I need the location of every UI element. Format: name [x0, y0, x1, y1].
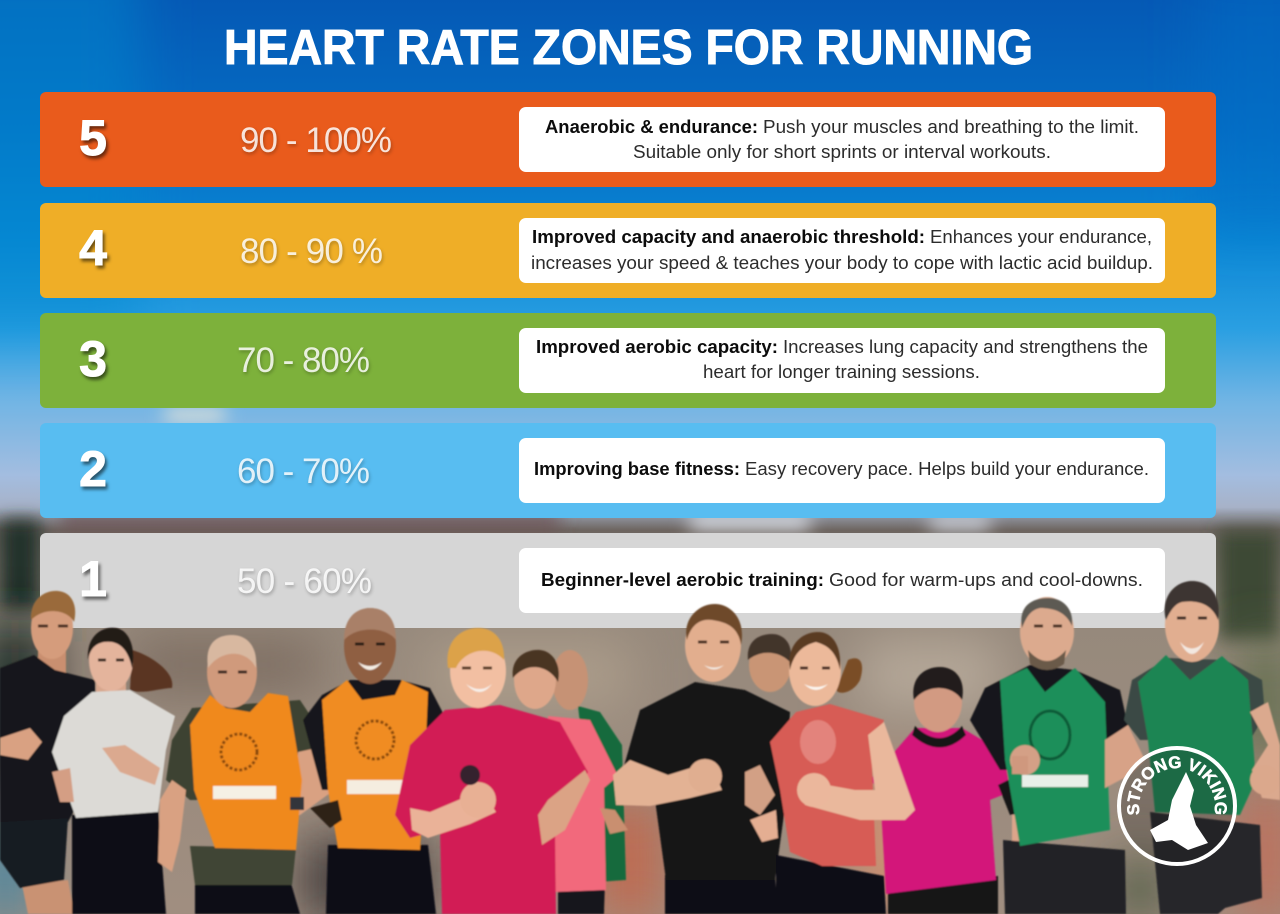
panel: zone 3	[40, 313, 1216, 408]
zone 2 number: 2	[79, 441, 107, 497]
logo: Strong Viking badge	[1117, 746, 1237, 866]
panel: zone 1	[40, 533, 1216, 628]
zone 5 description	[519, 107, 1165, 172]
zone 3 description: Improved aerobic capacity:	[536, 337, 778, 357]
panel: zone 5	[40, 92, 1216, 187]
zone 2 description	[519, 438, 1165, 503]
zone 4 number: 4	[79, 220, 107, 276]
zone 4 description: Enhances your endurance,	[930, 227, 1152, 247]
panel: zone 4	[40, 203, 1216, 298]
zone 2 description: Improving base fitness:	[534, 459, 740, 479]
runner: man in pink shirt with face paint	[513, 650, 628, 914]
zone 5 number: 5	[79, 110, 107, 166]
title: HEART RATE ZONES FOR RUNNING	[224, 21, 1033, 75]
icon: viking figure	[1150, 772, 1208, 850]
zone 3 description: heart for longer training sessions.	[703, 362, 980, 382]
zone 3 description: Increases lung capacity and strengthens the	[783, 337, 1148, 357]
zone 4 description: increases your speed & teaches your body to cope with lactic acid buildup.	[531, 253, 1153, 273]
zone 1 description: Beginner-level aerobic training:	[541, 570, 824, 590]
zone 3 percentage: 70 - 80%	[237, 341, 370, 380]
runner: woman in magenta shirt	[870, 667, 1040, 914]
zone 3 number: 3	[79, 331, 107, 387]
zone 1 percentage: 50 - 60%	[237, 562, 372, 601]
zone 4 percentage: 80 - 90 %	[240, 232, 383, 271]
zone 3 description	[519, 328, 1165, 393]
zone 2 percentage: 60 - 70%	[237, 452, 370, 491]
zone 1 description	[519, 548, 1165, 613]
zone 5 description: Suitable only for short sprints or interval workouts.	[633, 142, 1051, 162]
zone 2 description: Easy recovery pace. Helps build your endurance.	[745, 459, 1149, 479]
zone 1 description: Good for warm-ups and cool-downs.	[829, 570, 1143, 590]
zone 5 percentage: 90 - 100%	[240, 121, 392, 160]
runner: man in crimson long-sleeve shirt	[395, 628, 590, 914]
zone 1 number: 1	[79, 551, 107, 607]
zone 5 description: Anaerobic & endurance:	[545, 117, 758, 137]
runner: man in orange vest, smiling	[303, 608, 444, 914]
runner: man in black Nike t-shirt	[613, 604, 790, 914]
zone 4 description	[519, 218, 1165, 283]
panel: zone 2	[40, 423, 1216, 518]
runner: green shirt behind	[552, 650, 626, 882]
runner: man in green vest, far right	[1124, 581, 1280, 914]
zone 5 description: Push your muscles and breathing to the limit.	[763, 117, 1139, 137]
zone 4 description: Improved capacity and anaerobic threshold:	[532, 227, 925, 247]
illustration: group of runners	[0, 581, 1280, 914]
logo: Strong Viking badge: STRONG VIKING	[1126, 756, 1227, 815]
runner: woman in white t-shirt	[52, 628, 175, 914]
runner: man in black t-shirt, far left	[0, 591, 96, 914]
runner: man in green vest	[970, 597, 1145, 914]
runner: woman in coral t-shirt	[750, 632, 915, 914]
runner: man behind, dark hair	[748, 634, 791, 692]
runner: bald man in orange vest	[158, 635, 341, 914]
